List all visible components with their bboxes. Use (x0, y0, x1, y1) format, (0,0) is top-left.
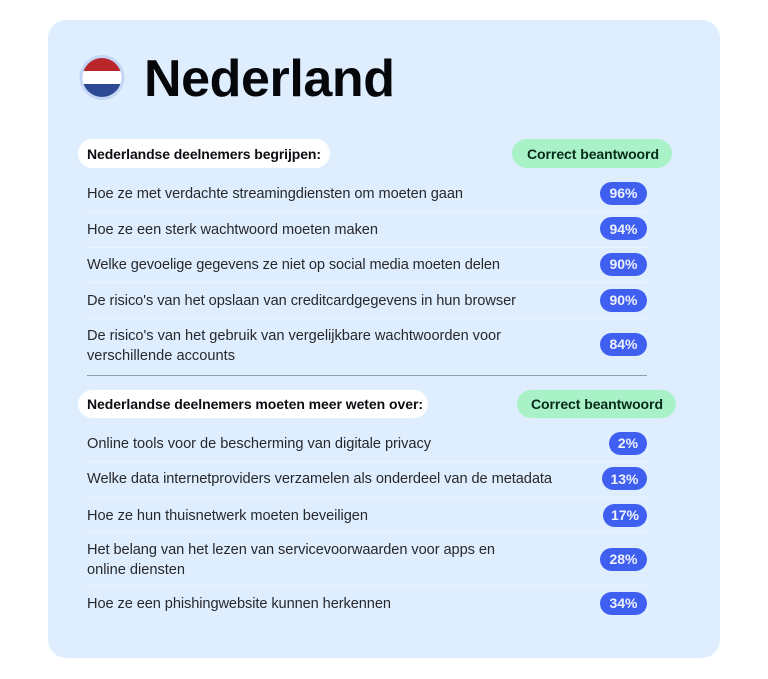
heading: begrijpen: Nederlandse deelnemers begrijpen: (87, 146, 321, 162)
row: servicevoorwaarden 28%: Het belang van het lezen van servicevoorwaarden voor apps en (87, 542, 495, 558)
section: deelnemers begrijpen (78, 139, 672, 364)
row: vergelijkbare wachtwoorden 84%: verschillende accounts (87, 348, 235, 364)
row: vergelijkbare wachtwoorden 84%: 84% (609, 336, 638, 352)
heading: begrijpen (78, 139, 330, 168)
row: thuisnetwerk 17%: 17% (611, 507, 640, 523)
row: metadata 13% (87, 467, 647, 490)
row: metadata 13%: 13% (610, 471, 639, 487)
row: streamingdiensten 96% (87, 182, 647, 205)
row: wachtwoord 94%: 94% (609, 221, 638, 237)
row: servicevoorwaarden 28%: online diensten (87, 562, 185, 578)
section: moeten meer weten (78, 390, 676, 615)
row: digitale privacy 2%: Online tools voor de bescherming van digitale privacy (87, 436, 432, 452)
label: correct beantwoord (512, 139, 672, 168)
label: correct beantwoord (517, 390, 676, 418)
row: creditcardgegevens 90%: 90% (609, 292, 638, 308)
row: servicevoorwaarden 28%: 28% (609, 551, 638, 567)
row: phishingwebsite 34%: Hoe ze een phishingwebsite kunnen herkennen (87, 596, 391, 612)
heading: meer weten (78, 390, 428, 418)
row: digitale privacy 2%: 2% (618, 435, 639, 451)
row: metadata 13%: Welke data internetproviders verzamelen als onderdeel van de metadata (87, 471, 553, 487)
row: phishingwebsite 34% (87, 592, 647, 615)
row: wachtwoord 94% (87, 217, 647, 240)
row: streamingdiensten 96%: 96% (609, 185, 638, 201)
row: servicevoorwaarden 28% (87, 542, 647, 578)
row: social media 90%: Welke gevoelige gegevens ze niet op social media moeten delen (87, 257, 500, 273)
row: thuisnetwerk 17%: Hoe ze hun thuisnetwerk moeten beveiligen (87, 508, 368, 524)
label: correct beantwoord: Correct beantwoord (527, 146, 659, 162)
row: creditcardgegevens 90% (87, 289, 647, 312)
row: social media 90%: 90% (609, 256, 638, 272)
row: creditcardgegevens 90%: De risico's van het opslaan van creditcardgegevens in hun browser (87, 293, 516, 309)
title: Nederland (144, 50, 395, 108)
row: digitale privacy 2% (87, 432, 647, 455)
row: phishingwebsite 34%: 34% (609, 595, 638, 611)
heading: meer weten: Nederlandse deelnemers moeten meer weten over: (87, 396, 423, 412)
label: correct beantwoord: Correct beantwoord (531, 396, 663, 412)
icon: Dutch flag (80, 55, 124, 100)
row: thuisnetwerk 17% (87, 504, 647, 527)
row: vergelijkbare wachtwoorden 84% (87, 328, 647, 364)
row: social media 90% (87, 253, 647, 276)
row: streamingdiensten 96%: Hoe ze met verdachte streamingdiensten om moeten gaan (87, 186, 463, 202)
row: vergelijkbare wachtwoorden 84%: De risico's van het gebruik van vergelijkbare wachtwoorden voor (87, 328, 501, 344)
row: wachtwoord 94%: Hoe ze een sterk wachtwoord moeten maken (87, 222, 378, 238)
